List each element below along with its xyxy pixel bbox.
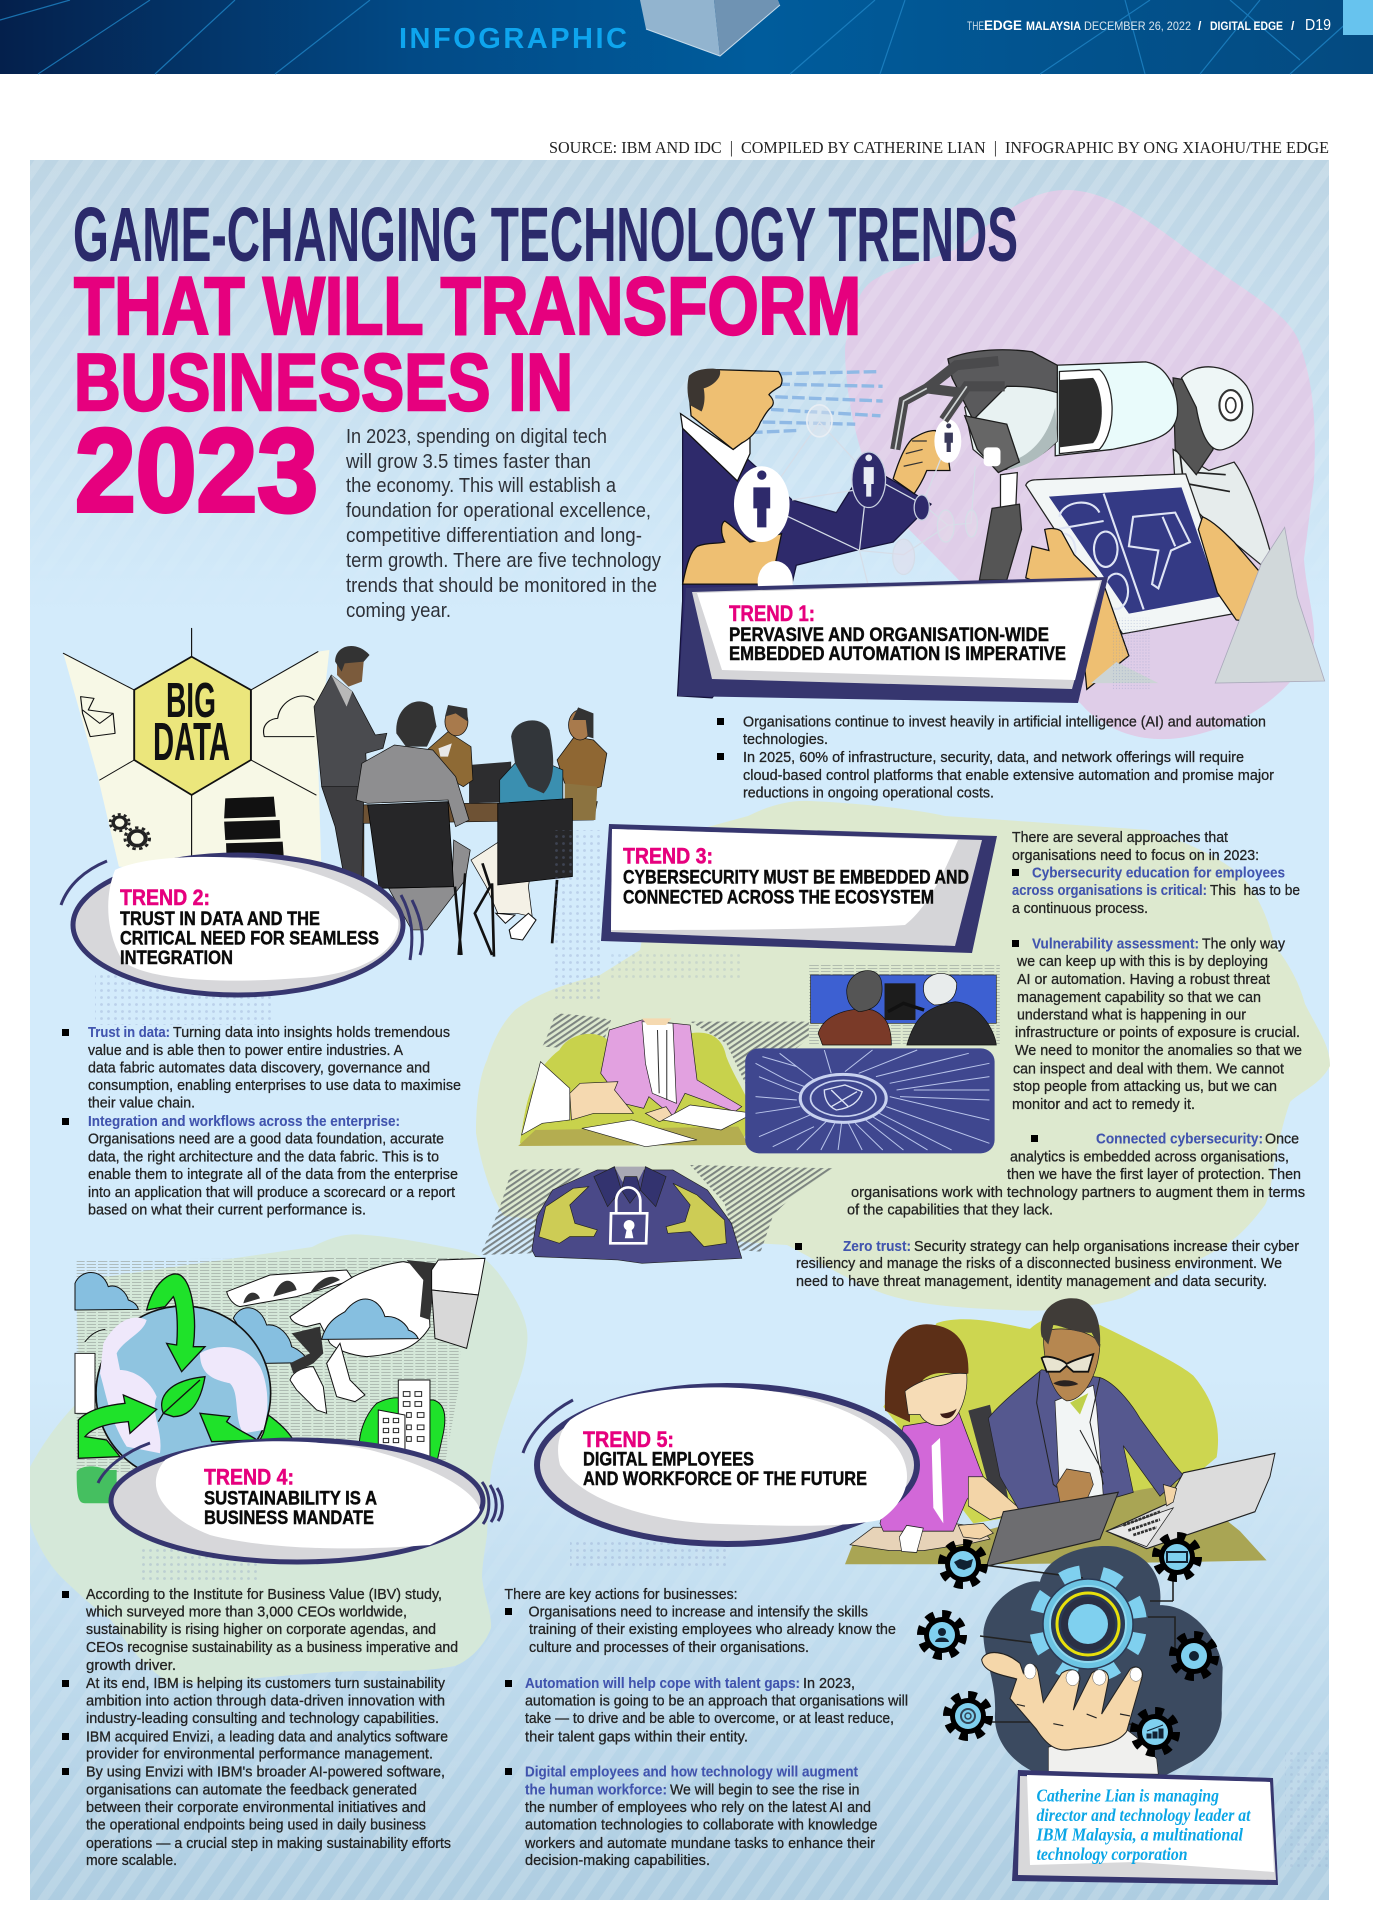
robot wrist and fingers bbox=[965, 374, 1057, 470]
robot forearm bbox=[1055, 362, 1178, 456]
trend 3 body text: resiliency and manage the risks of a disconnected business environment. We bbox=[796, 1255, 1282, 1272]
robot hand bbox=[227, 1258, 485, 1413]
trend 2 heading: TREND 2: bbox=[120, 885, 210, 910]
intro paragraph bbox=[345, 426, 661, 622]
green blob: trend 3 bbox=[476, 801, 1330, 1311]
trend 5 heading: DIGITAL EMPLOYEES bbox=[583, 1448, 754, 1470]
trend 4 body text: At its end, IBM is helping its customers turn sustainability bbox=[86, 1675, 445, 1692]
icon: gear target bbox=[948, 1696, 988, 1736]
trend 5 heading: TREND 5: bbox=[583, 1427, 674, 1452]
text: big data: BIG bbox=[166, 674, 216, 728]
publication line: EDGE bbox=[984, 17, 1022, 33]
trend 5 body text bbox=[504, 1586, 908, 1869]
trend 3 body text: The only way bbox=[1202, 936, 1285, 952]
trend 3 body text: a continuous process. bbox=[1012, 900, 1148, 917]
illustration: sustainability bbox=[75, 1257, 485, 1503]
trend 5 heading bbox=[583, 1427, 867, 1490]
trend 2 body text: Trust in data: bbox=[88, 1024, 170, 1041]
trend 5 body text: automation is going to be an approach that organisations will bbox=[525, 1692, 908, 1710]
trend 3 body text: organisations need to focus on in 2023: bbox=[1012, 847, 1259, 864]
chair 2 bbox=[498, 798, 572, 885]
icon: glass cube bbox=[640, 0, 780, 56]
trend 5 body text: the human workforce: bbox=[525, 1782, 667, 1798]
trend 2 body text: data fabric automates data discovery, governance and bbox=[88, 1060, 430, 1076]
publication line bbox=[967, 17, 1331, 34]
network lines bbox=[762, 422, 975, 584]
trend 3 body text bbox=[795, 829, 1305, 1290]
trend 1 heading: PERVASIVE AND ORGANISATION-WIDE bbox=[729, 624, 1049, 646]
trend 3 body text: Zero trust: bbox=[843, 1238, 911, 1255]
main title: BUSINESSES IN bbox=[74, 338, 573, 428]
trend 5 body text: In 2023, bbox=[803, 1675, 855, 1692]
big data hexagons bbox=[63, 628, 329, 880]
trend 4 oval bbox=[98, 1440, 502, 1562]
publication line: DIGITAL EDGE bbox=[1210, 19, 1283, 33]
trend 3 body text: Security strategy can help organisations increase their cyber bbox=[914, 1238, 1299, 1255]
trend 4 heading: SUSTAINABILITY IS A bbox=[204, 1488, 377, 1510]
desk bbox=[845, 1483, 1267, 1564]
trend 3 card bbox=[601, 824, 997, 953]
trend 4 body text: industry-leading consulting and technology capabilities. bbox=[86, 1710, 439, 1727]
intro paragraph: term growth. There are five technology bbox=[346, 550, 661, 572]
publication line: D19 bbox=[1305, 17, 1331, 34]
illustration: big data meeting bbox=[63, 628, 607, 957]
recycle arrows bbox=[78, 1274, 293, 1458]
trend 1 body text: cloud-based control platforms that enable extensive automation and promise major bbox=[743, 767, 1274, 784]
trend 4 body text: By using Envizi with IBM's broader AI-powered software, bbox=[86, 1764, 445, 1780]
trend 3 body text: need to have threat management, identity management and data security. bbox=[796, 1273, 1267, 1290]
intro paragraph: trends that should be monitored in the bbox=[346, 575, 657, 597]
buildings and tree bbox=[77, 1380, 445, 1503]
trend 4 body text: ambition into action through data-driven innovation with bbox=[86, 1692, 445, 1710]
illustration: man and robot arm with tablet bbox=[678, 350, 1325, 698]
trend 5 body text: There are key actions for businesses: bbox=[504, 1586, 738, 1603]
text: big data: DATA bbox=[153, 712, 230, 772]
trend 5 oval bbox=[523, 1386, 917, 1544]
header band bbox=[0, 0, 1373, 74]
trend 3 heading: CYBERSECURITY MUST BE EMBEDDED AND bbox=[623, 866, 969, 888]
green blob: trend 4 bbox=[30, 1234, 528, 1683]
trend 4 body text: IBM acquired Envizi, a leading data and analytics software bbox=[86, 1728, 448, 1746]
icon: central gear bbox=[1030, 1566, 1146, 1682]
trend 2 body text bbox=[62, 1024, 461, 1218]
robot shoulder bbox=[1173, 378, 1213, 475]
trend 3 body text: can inspect and deal with them. We cannot bbox=[1013, 1060, 1285, 1078]
trend 2 body text: Organisations need are a good data foundation, accurate bbox=[88, 1130, 444, 1148]
icon: gear money bbox=[1157, 1537, 1197, 1577]
trend 5 body text: Automation will help cope with talent gaps: bbox=[525, 1675, 800, 1692]
trend 1 heading: TREND 1: bbox=[729, 601, 815, 626]
data dashes bbox=[750, 372, 883, 433]
trend 2 oval bbox=[61, 855, 422, 995]
trend 3 body text: stop people from attacking us, but we can bbox=[1013, 1078, 1277, 1095]
trend 5 body text: We will begin to see the rise in bbox=[670, 1782, 860, 1798]
trend 5 body text: automation technologies to collaborate with knowledge bbox=[525, 1816, 878, 1834]
trend 5 body text: the number of employees who rely on the latest AI and bbox=[525, 1799, 871, 1816]
author text: technology corporation bbox=[1036, 1844, 1188, 1864]
trend 2 heading bbox=[120, 885, 379, 969]
intro paragraph: foundation for operational excellence, bbox=[346, 500, 651, 522]
intro paragraph: coming year. bbox=[346, 600, 451, 622]
trend 5 body text: Organisations need to increase and intensify the skills bbox=[528, 1604, 868, 1620]
trend 3 body text: management capability so that we can bbox=[1017, 989, 1261, 1006]
trend 5 body text: Digital employees and how technology will augment bbox=[525, 1764, 858, 1780]
trend 2 body text: based on what their current performance is. bbox=[88, 1202, 366, 1218]
robot lower link bbox=[1000, 473, 1017, 521]
trend 3 body text: Cybersecurity education for employees bbox=[1032, 864, 1285, 882]
robot arm support bbox=[1173, 449, 1270, 565]
hatching bbox=[480, 1013, 833, 1255]
author text: director and technology leader at bbox=[1036, 1805, 1251, 1825]
trend 3 body text: then we have the first layer of protection. Then bbox=[1007, 1166, 1301, 1183]
person node bbox=[734, 466, 790, 542]
trend 4 heading bbox=[204, 1464, 377, 1529]
intro paragraph: the economy. This will establish a bbox=[346, 475, 617, 497]
author text: IBM Malaysia, a multinational bbox=[1036, 1824, 1243, 1844]
trend 3 body text: Vulnerability assessment: bbox=[1032, 936, 1199, 952]
signing scene bbox=[518, 1018, 754, 1147]
publication line: MALAYSIA bbox=[1026, 19, 1081, 33]
trend 5 body text: culture and processes of their organisations. bbox=[529, 1639, 809, 1656]
trend 2 body text: enable them to integrate all of the data from the enterprise bbox=[88, 1166, 458, 1183]
chair 1 bbox=[368, 802, 454, 888]
man hands bbox=[683, 521, 782, 584]
section label: INFOGRAPHIC bbox=[399, 23, 627, 55]
trend 4 body text: between their corporate environmental initiatives and bbox=[86, 1799, 426, 1816]
trend 3 body text: Once bbox=[1265, 1130, 1299, 1148]
chair back bbox=[968, 1405, 1010, 1516]
trend 3 body text: Connected cybersecurity: bbox=[1096, 1130, 1263, 1148]
intro paragraph: will grow 3.5 times faster than bbox=[345, 451, 591, 473]
monitoring scene bbox=[809, 965, 1000, 1045]
man suit bbox=[678, 428, 931, 698]
lock suit bbox=[532, 1167, 742, 1263]
trend 1 heading bbox=[729, 601, 1066, 665]
tablet bbox=[1026, 474, 1234, 634]
publication line: THE bbox=[967, 19, 984, 33]
trend 1 body text bbox=[717, 714, 1274, 802]
man bbox=[988, 1298, 1183, 1512]
trend 2 heading: INTEGRATION bbox=[120, 947, 233, 969]
trend 4 body text: which surveyed more than 3,000 CEOs worldwide, bbox=[85, 1604, 407, 1620]
intro paragraph: competitive differentiation and long- bbox=[346, 525, 642, 547]
trend 2 body text: Turning data into insights holds tremendous bbox=[173, 1024, 450, 1041]
laptops bbox=[987, 1492, 1118, 1566]
icon: gear clock bbox=[1174, 1636, 1214, 1676]
globe bbox=[96, 1306, 271, 1481]
trend 4 body text: provider for environmental performance management. bbox=[86, 1746, 433, 1762]
main title bbox=[73, 192, 1018, 537]
trend 4 heading: TREND 4: bbox=[204, 1464, 294, 1490]
trend 3 body text: AI or automation. Having a robust threat bbox=[1017, 971, 1271, 988]
trend 4 body text: the operational endpoints being used in daily business bbox=[86, 1816, 426, 1834]
trend 5 body text: decision-making capabilities. bbox=[525, 1852, 710, 1869]
trend 2 body text: value and is able then to power entire industries. A bbox=[88, 1042, 403, 1059]
trend 4 body text bbox=[62, 1586, 458, 1869]
dark cloud bbox=[983, 1546, 1223, 1778]
trend 3 body text: understand what is happening in our bbox=[1017, 1006, 1246, 1024]
icon: gear handshake bbox=[943, 1544, 983, 1584]
trend 1 body text: In 2025, 60% of infrastructure, security, data, and network offerings will require bbox=[743, 749, 1244, 766]
trend 4 body text: growth driver. bbox=[86, 1657, 176, 1674]
trend 2 body text: their value chain. bbox=[88, 1094, 195, 1112]
icon: gear person bbox=[922, 1615, 962, 1655]
trend 1 body text: reductions in ongoing operational costs. bbox=[743, 784, 994, 802]
seated man bbox=[356, 745, 469, 827]
author box bbox=[1012, 1770, 1278, 1885]
trend 2 heading: CRITICAL NEED FOR SEAMLESS bbox=[120, 928, 379, 950]
trend 4 body text: sustainability is rising higher on corporate agendas, and bbox=[86, 1621, 436, 1638]
trend 3 heading: CONNECTED ACROSS THE ECOSYSTEM bbox=[623, 886, 934, 908]
trend 4 body text: CEOs recognise sustainability as a business imperative and bbox=[86, 1639, 458, 1656]
author text bbox=[1036, 1786, 1251, 1864]
trend 3 body text: We need to monitor the anomalies so that we bbox=[1015, 1042, 1302, 1059]
woman bbox=[471, 840, 532, 917]
trend 4 body text: more scalable. bbox=[86, 1852, 177, 1869]
trend 3 heading bbox=[623, 844, 969, 908]
sleeves bbox=[1215, 527, 1325, 683]
trend 3 body text: There are several approaches that bbox=[1012, 829, 1229, 846]
trend 4 heading: BUSINESS MANDATE bbox=[204, 1507, 374, 1529]
standing man bbox=[322, 787, 364, 880]
publication line: / bbox=[1291, 19, 1295, 33]
trend 5 body text: workers and automate mundane tasks to enhance their bbox=[524, 1835, 875, 1852]
hatched wall bbox=[77, 1257, 463, 1473]
trend 3 body text: monitor and act to remedy it. bbox=[1012, 1096, 1195, 1113]
trend 4 body text: organisations can automate the feedback generated bbox=[86, 1782, 417, 1798]
halftone dots bbox=[95, 830, 1329, 1870]
trend 3 body text: across organisations is critical: bbox=[1012, 882, 1207, 899]
trend 1 card bbox=[678, 577, 1108, 703]
text: big data bbox=[153, 674, 230, 772]
author text: Catherine Lian is managing bbox=[1036, 1786, 1219, 1806]
trend 1 body text: technologies. bbox=[743, 731, 828, 748]
illustration: cybersecurity scenes bbox=[480, 965, 1000, 1263]
main title: 2023 bbox=[75, 405, 318, 537]
illustration: digital employees bbox=[845, 1298, 1275, 1778]
trend 3 body text: organisations work with technology partners to augment them in terms bbox=[851, 1184, 1305, 1201]
trend 3 body text: we can keep up with this is by deploying bbox=[1016, 953, 1268, 970]
trend 2 heading: TRUST IN DATA AND THE bbox=[120, 908, 320, 930]
trend 3 body text: This has to be bbox=[1210, 882, 1300, 899]
trend 3 body text: analytics is embedded across organisations, bbox=[1010, 1148, 1289, 1166]
trend 5 body text: take — to drive and be able to overcome, or at least reduce, bbox=[525, 1710, 894, 1727]
intro paragraph: In 2023, spending on digital tech bbox=[346, 426, 607, 448]
icon: hand bbox=[982, 1653, 1158, 1774]
shield circuit board bbox=[745, 1048, 995, 1153]
trend 2 body text: data, the right architecture and the data fabric. This is to bbox=[88, 1148, 439, 1166]
icon: gear chart bbox=[1135, 1712, 1175, 1752]
trend 2 body text: consumption, enabling enterprises to use data to maximise bbox=[88, 1077, 461, 1094]
trend 5 heading: AND WORKFORCE OF THE FUTURE bbox=[583, 1468, 867, 1490]
trend 3 body text: of the capabilities that they lack. bbox=[847, 1202, 1053, 1218]
tablet hands bbox=[1026, 529, 1129, 689]
clouds bbox=[75, 1272, 138, 1310]
man head bbox=[689, 369, 782, 449]
trend 2 body text: into an application that will produce a scorecard or a report bbox=[88, 1184, 456, 1201]
trend 5 body text: training of their existing employees who already know the bbox=[529, 1621, 896, 1638]
trend 4 body text: According to the Institute for Business Value (IBV) study, bbox=[86, 1586, 442, 1603]
trend 5 body text: their talent gaps within their entity. bbox=[525, 1728, 748, 1746]
connector lines bbox=[976, 1563, 1195, 1730]
source line: SOURCE: IBM AND IDC | COMPILED BY CATHERINE LIAN | INFOGRAPHIC BY ONG XIAOHU/THE EDGE bbox=[549, 138, 1329, 157]
main title: THAT WILL TRANSFORM bbox=[74, 261, 861, 352]
publication line: / bbox=[1198, 19, 1202, 33]
meeting people bbox=[314, 646, 607, 957]
trend 2 body text: Integration and workflows across the enterprise: bbox=[88, 1113, 400, 1130]
pink blob bbox=[845, 190, 1315, 739]
trend 3 body text: infrastructure or points of exposure is crucial. bbox=[1015, 1024, 1300, 1041]
trend 3 heading: TREND 3: bbox=[623, 844, 713, 868]
trend 1 heading: EMBEDDED AUTOMATION IS IMPERATIVE bbox=[729, 643, 1066, 665]
woman bbox=[850, 1324, 1023, 1553]
trend 1 body text: Organisations continue to invest heavily in artificial intelligence (AI) and automation bbox=[743, 714, 1266, 730]
trend 4 body text: operations — a crucial step in making sustainability efforts bbox=[86, 1835, 451, 1852]
publication line: DECEMBER 26, 2022 bbox=[1084, 19, 1191, 33]
